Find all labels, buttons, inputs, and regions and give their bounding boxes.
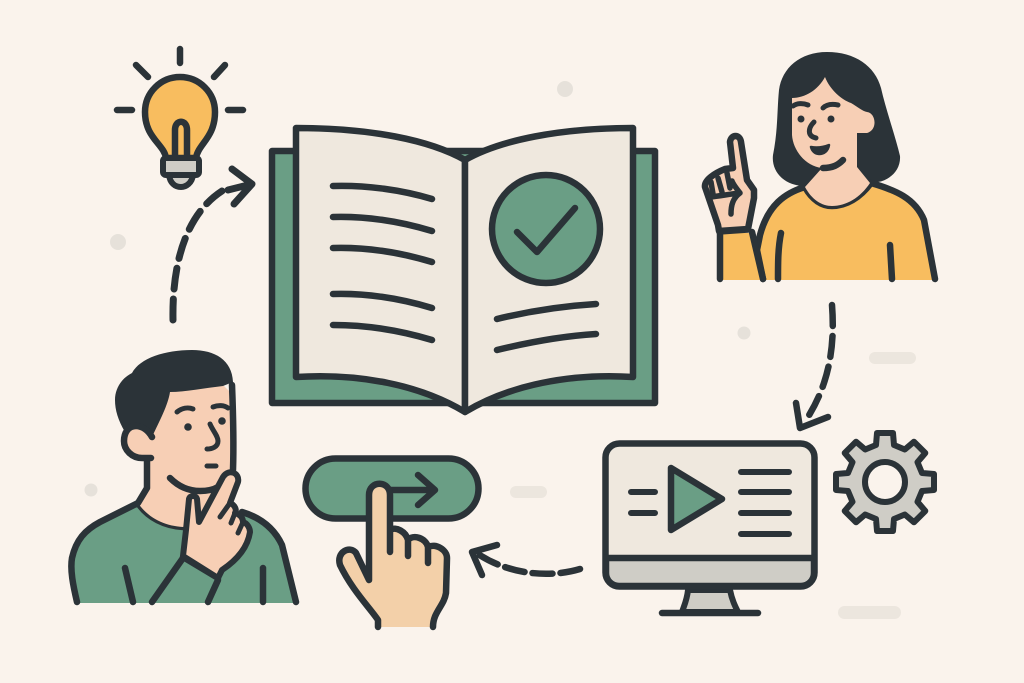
monitor chin [606,558,814,586]
check badge [492,175,600,283]
left page text lines [333,186,432,340]
neck and face [792,77,875,206]
icon: gear [836,433,934,531]
man's face features [177,406,228,466]
sleeve [720,233,763,280]
play button [671,468,722,530]
sleeve [152,558,218,602]
woman's face features [793,104,838,154]
right page [465,128,633,412]
arrow: woman to monitor [796,305,833,428]
screen [606,444,814,586]
button with arrow [306,458,478,518]
monitor with video [606,444,814,613]
stand [682,590,738,612]
person: woman with raised finger [705,52,935,280]
sweater [757,183,935,280]
open book [272,128,655,412]
person: thinking man [71,350,296,603]
text lines [631,472,789,534]
ear [124,427,152,458]
book cover [272,151,655,403]
neck and face [138,385,233,527]
hair [773,52,900,186]
pointing hand outline [339,484,447,627]
icon: light bulb [117,49,243,187]
hair [115,350,233,437]
pointing hand [339,484,447,627]
sweater [71,503,296,603]
arrow: monitor to hand [472,545,580,575]
hand at chin [183,472,250,578]
arrow: man to book [173,169,252,320]
raised hand [705,136,754,231]
left page [296,128,465,412]
right page text lines [497,304,596,350]
